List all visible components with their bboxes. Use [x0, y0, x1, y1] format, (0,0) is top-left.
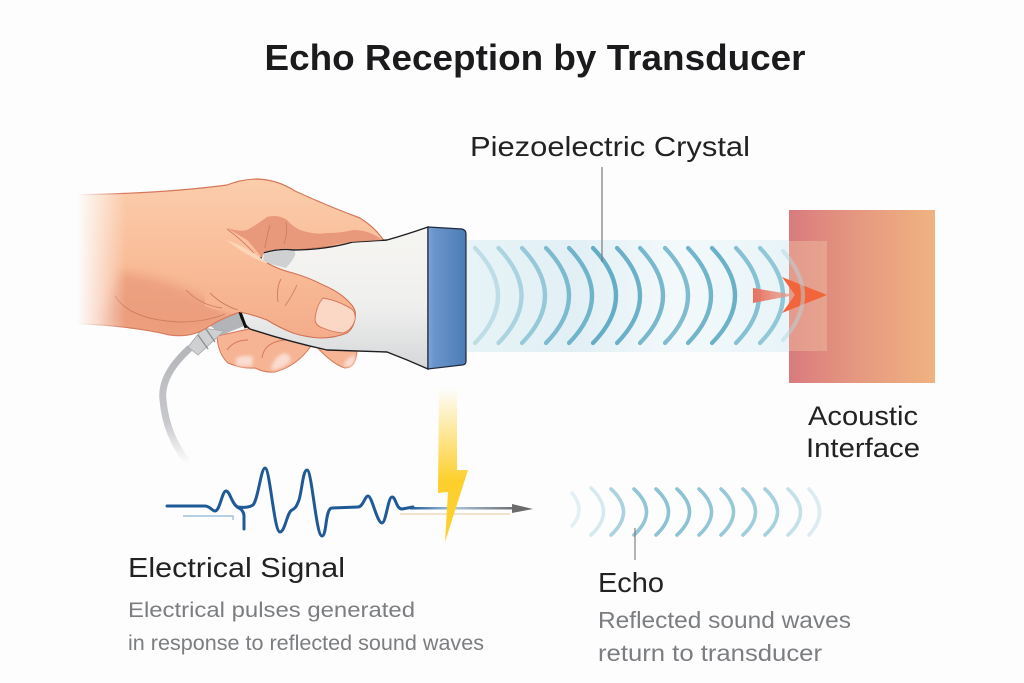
transducer body	[240, 227, 428, 369]
palm and back of hand	[62, 179, 384, 336]
chart: electrical signal waveform	[167, 468, 518, 536]
cable	[163, 348, 190, 463]
thumb outline	[240, 263, 355, 338]
finger creases	[227, 340, 285, 358]
lower fingers	[217, 326, 357, 372]
icon: lightning bolt	[438, 388, 468, 542]
label: acoustic interface: Acoustic	[808, 401, 918, 431]
fingernails	[236, 353, 355, 370]
ultrasound beam with wave arcs	[467, 240, 790, 352]
text block: electrical signal	[128, 552, 484, 655]
transducer grey shoulder	[263, 250, 295, 268]
cable connector	[188, 312, 244, 355]
text block: electrical signal: Electrical Signal	[128, 552, 345, 583]
text block: echo	[598, 567, 851, 666]
arrow: signal direction	[512, 504, 533, 513]
title: Echo Reception by Transducer	[264, 37, 806, 78]
echo wave arcs	[572, 488, 820, 535]
transducer cable collar	[240, 312, 246, 328]
panel: acoustic interface block	[789, 210, 935, 383]
text block: electrical signal: in response to reflected sound waves	[128, 632, 484, 655]
icon: hand holding transducer	[56, 175, 466, 463]
thumbnail	[315, 298, 355, 333]
knuckle and palm creases	[115, 222, 297, 322]
echo leader line	[634, 528, 636, 560]
text block: echo: Echo	[598, 567, 664, 598]
last wave arc crossing interface	[783, 251, 803, 340]
transducer face	[428, 227, 466, 369]
label: piezoelectric crystal: Piezoelectric Crystal	[470, 131, 750, 162]
text block: echo: Reflected sound waves	[598, 607, 851, 633]
thumb	[205, 235, 355, 338]
arrow: incident sound direction	[753, 277, 827, 313]
thumb highlight	[226, 240, 268, 264]
shadow between fingers	[227, 216, 382, 258]
label: acoustic interface: Interface	[806, 433, 920, 463]
text block: echo: return to transducer	[598, 640, 822, 666]
shaded lower palm	[106, 270, 228, 335]
label: acoustic interface	[806, 401, 920, 463]
text block: electrical signal: Electrical pulses generated	[128, 599, 415, 622]
arm fade	[56, 175, 126, 330]
